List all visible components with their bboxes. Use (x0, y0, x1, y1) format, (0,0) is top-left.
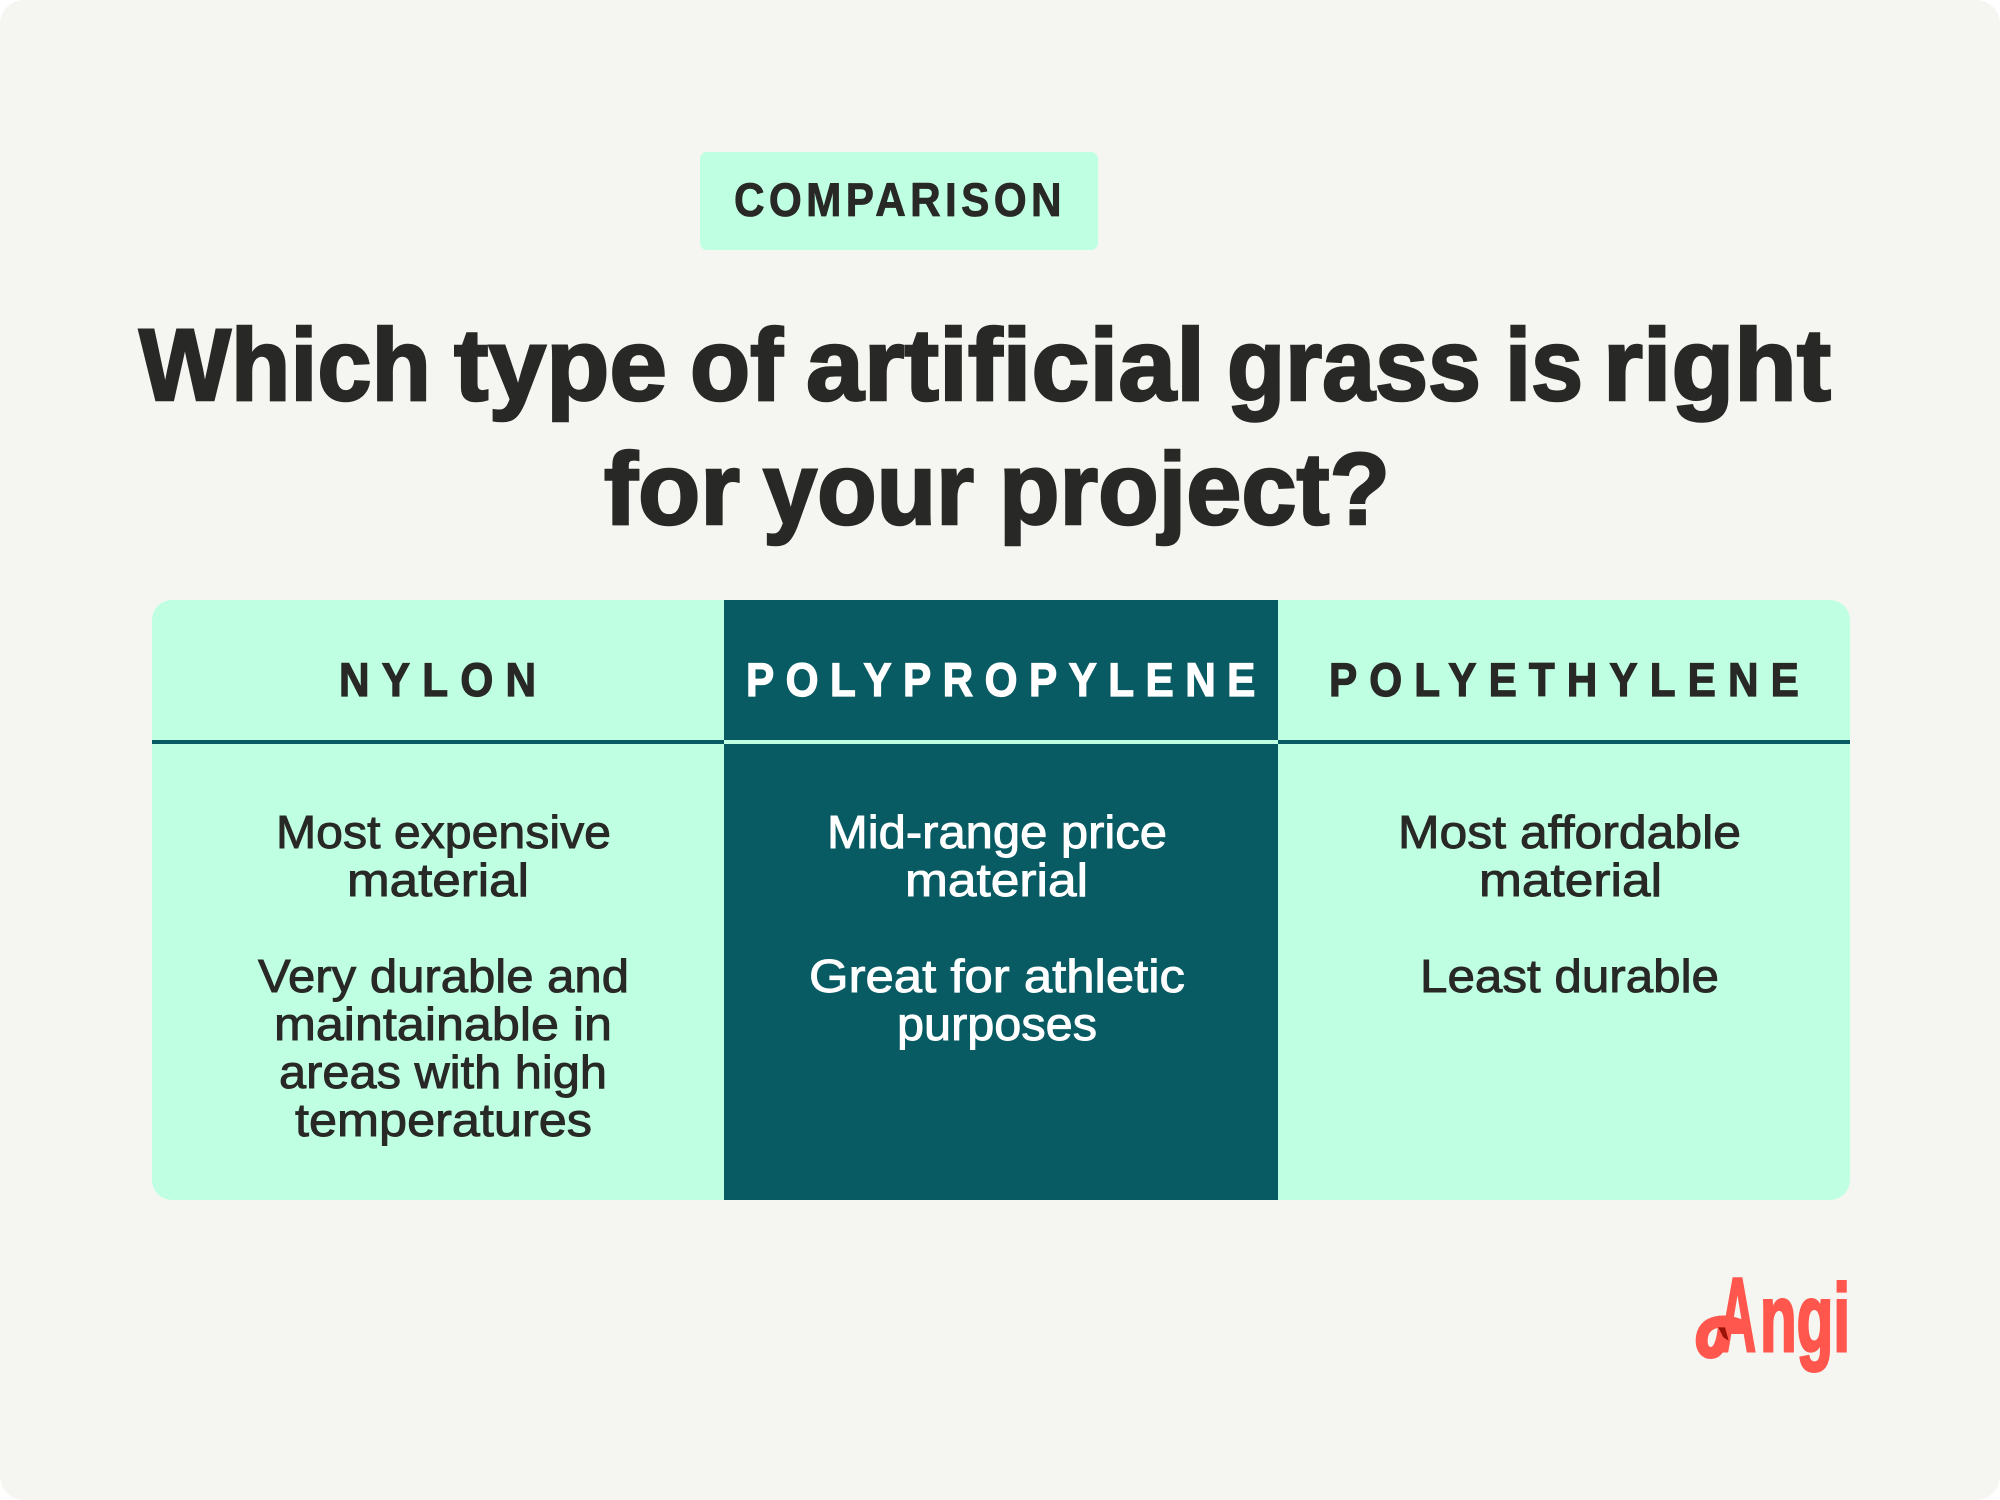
logo: Angi (1702, 1257, 1850, 1374)
text: nylon details: maintainable in (274, 998, 612, 1050)
title: for (604, 432, 740, 546)
text: nylon details: material (347, 854, 529, 906)
logo: Angi: A (1719, 1257, 1756, 1374)
text: polyethylene details (1398, 806, 1741, 1002)
panel: polyethylene column (1278, 600, 1850, 1200)
logo: Angi: ngi (1760, 1265, 1850, 1372)
title: Which (139, 308, 431, 422)
text: polypropylene details: Great for athletic (809, 950, 1185, 1002)
title: type (454, 308, 667, 422)
text: nylon details: temperatures (295, 1094, 592, 1146)
heading: nylon: NYLON (339, 655, 536, 707)
title: artificial (806, 308, 1205, 422)
text: polypropylene details: Mid-range price (827, 806, 1167, 858)
text: polyethylene details: Least durable (1420, 950, 1719, 1002)
comparison table (152, 600, 1850, 1200)
text: polyethylene details: material (1479, 854, 1662, 906)
text: polypropylene details: material (905, 854, 1088, 906)
panel: nylon column (152, 600, 724, 1200)
text: nylon details: areas with high (279, 1046, 607, 1098)
title: of (690, 308, 784, 422)
title: your (763, 432, 974, 546)
text: polyethylene details: Most affordable (1398, 806, 1741, 858)
tag: comparison (700, 152, 1098, 250)
text: polypropylene details (809, 806, 1185, 1050)
heading: polypropylene: POLYPROPYLENE (746, 655, 1255, 707)
title (139, 308, 1831, 546)
title: right (1603, 308, 1831, 422)
text: polypropylene details: purposes (897, 998, 1097, 1050)
tag: comparison: COMPARISON (734, 175, 1062, 227)
title: is (1505, 308, 1583, 422)
text: nylon details (258, 806, 629, 1146)
text: nylon details: Most expensive (276, 806, 611, 858)
text: nylon details: Very durable and (258, 950, 629, 1002)
heading: polyethylene: POLYETHYLENE (1329, 655, 1799, 707)
title: grass (1227, 308, 1481, 422)
title: project? (999, 432, 1390, 546)
panel: polypropylene column (724, 600, 1278, 1200)
